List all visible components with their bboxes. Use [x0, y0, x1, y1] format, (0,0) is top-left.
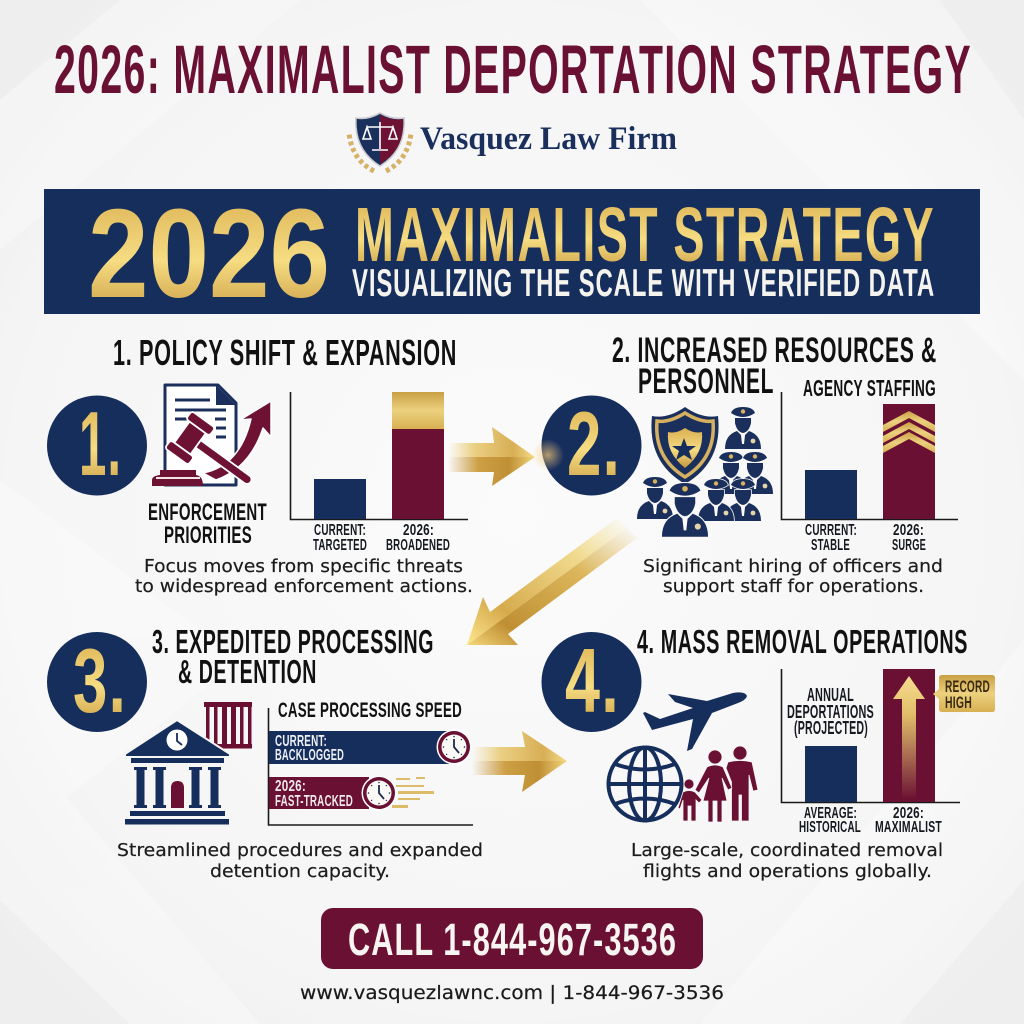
call button — [321, 908, 703, 969]
callout: record high: RECORD — [945, 677, 990, 696]
bar chart: agency staffing: AGENCY STAFFING — [803, 375, 936, 401]
heading 3: & DETENTION — [178, 653, 317, 690]
heading 2: PERSONNEL — [638, 362, 774, 401]
bar chart: agency staffing: CURRENT: — [805, 522, 857, 539]
number badge 2: 2. — [567, 394, 621, 495]
bar chart: agency staffing: STABLE — [811, 537, 850, 554]
panel: 4 removal — [542, 623, 995, 882]
arrow: step 3 to 4 — [472, 731, 567, 792]
icon caption: enforcement priorities: PRIORITIES — [164, 522, 252, 549]
icon: globe — [608, 748, 682, 820]
icon: plane — [643, 692, 747, 751]
number badge 3: 3. — [73, 631, 127, 732]
bar chart: annual deportations: (PROJECTED) — [794, 718, 868, 738]
bar chart: case processing speed: CASE PROCESSING SPEED — [278, 699, 462, 722]
heading 3 — [152, 623, 434, 690]
banner year: 2026 — [88, 183, 330, 324]
description 3: detention capacity. — [210, 861, 390, 882]
panel: 2 resources — [532, 331, 958, 597]
description 1: to widespread enforcement actions. — [135, 576, 473, 597]
description 4 — [631, 840, 943, 882]
panel: 3 processing — [47, 623, 483, 882]
number badge 1: 1. — [79, 394, 122, 495]
description 2 — [643, 556, 943, 597]
bar chart: annual deportations: MAXIMALIST — [875, 819, 942, 836]
bar chart: case processing speed: FAST-TRACKED — [275, 793, 353, 810]
description 1: Focus moves from specific threats — [144, 556, 463, 577]
icon: badge and officers — [637, 407, 773, 537]
heading 3: 3. EXPEDITED PROCESSING — [152, 623, 434, 660]
bar chart: agency staffing: 2026: — [893, 522, 924, 539]
panel: 1 policy shift — [47, 332, 473, 597]
icon caption: enforcement priorities — [148, 499, 267, 549]
bar chart: enforcement: 2026: — [403, 522, 434, 539]
arrow: step 1 to 2 — [448, 427, 535, 486]
bar chart: enforcement: TARGETED — [313, 537, 367, 554]
description 4: flights and operations globally. — [643, 861, 932, 882]
icon: jail bars — [204, 702, 252, 748]
footer contact: www.vasquezlawnc.com | 1-844-967-3536 — [300, 982, 724, 1004]
bar chart: annual deportations — [782, 669, 995, 836]
callout: record high: HIGH — [945, 693, 972, 712]
bar chart: annual deportations: 2026: — [893, 805, 924, 822]
description 3 — [117, 840, 483, 882]
icon: document, gavel and arrow — [152, 385, 271, 501]
bar chart: annual deportations: DEPORTATIONS — [787, 702, 874, 722]
arrow: step 2 to 3 — [467, 518, 637, 645]
bar chart: enforcement: CURRENT: — [314, 522, 366, 539]
icon: family — [678, 746, 758, 822]
banner — [44, 183, 980, 324]
heading 1: 1. POLICY SHIFT & EXPANSION — [113, 332, 457, 373]
description 4: Large-scale, coordinated removal — [631, 840, 943, 861]
bar chart: annual deportations: ANNUAL — [807, 685, 854, 705]
description 2: support staff for operations. — [663, 576, 924, 597]
bar chart: case processing speed: CURRENT: — [275, 733, 327, 750]
bar chart: case processing speed — [268, 699, 473, 825]
bar chart: annual deportations: HISTORICAL — [799, 819, 861, 836]
bar chart: case processing speed: BACKLOGGED — [275, 747, 344, 764]
description 1 — [135, 556, 473, 597]
icon: courthouse — [125, 720, 230, 824]
bar chart: agency staffing: SURGE — [892, 537, 926, 554]
description 3: Streamlined procedures and expanded — [117, 840, 483, 861]
bar chart: enforcement — [290, 392, 468, 554]
call button: CALL 1-844-967-3536 — [348, 914, 677, 965]
icon: shield with scales — [349, 113, 411, 171]
bar chart: agency staffing — [782, 375, 958, 554]
icon caption: enforcement priorities: ENFORCEMENT — [148, 499, 267, 526]
number badge 2 — [532, 394, 642, 496]
logo wordmark: Vasquez Law Firm — [420, 121, 677, 157]
callout: record high — [933, 675, 995, 712]
description 2: Significant hiring of officers and — [643, 556, 943, 577]
bar chart: case processing speed: 2026: — [275, 778, 306, 795]
number badge 4: 4. — [565, 631, 620, 732]
bar chart: enforcement: BROADENED — [386, 537, 450, 554]
number badge 1 — [47, 394, 147, 496]
heading 2 — [612, 331, 937, 401]
bar chart: annual deportations: AVERAGE: — [804, 805, 857, 822]
logo: Vasquez Law Firm — [349, 113, 677, 171]
